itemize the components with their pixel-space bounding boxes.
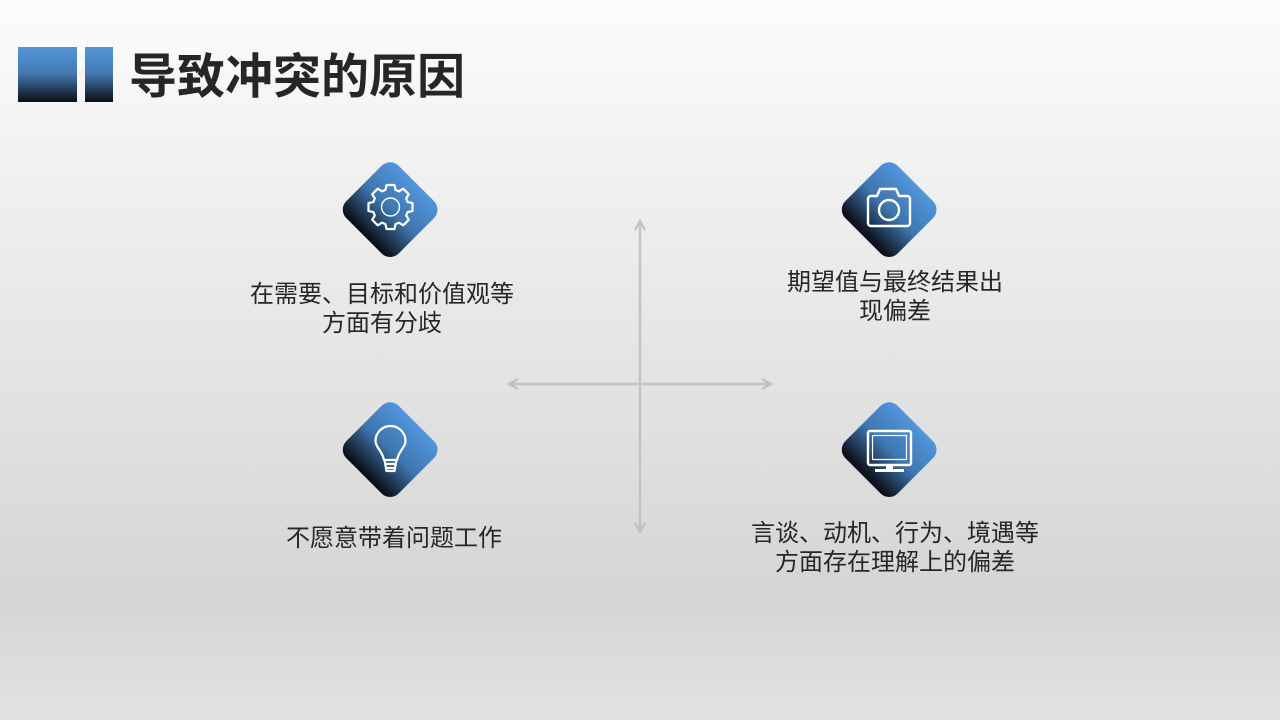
icon: monitor diamond xyxy=(842,402,936,497)
small title bar xyxy=(85,47,113,102)
text: bottom right: 言谈、动机、行为、境遇等 xyxy=(751,520,1039,547)
text: bottom right: 方面存在理解上的偏差 xyxy=(775,549,1015,576)
text: bottom right xyxy=(751,520,1039,576)
text: top left xyxy=(250,281,514,337)
cross arrows xyxy=(507,218,774,534)
text: top left: 在需要、目标和价值观等 xyxy=(250,281,514,308)
text: top right: 期望值与最终结果出 xyxy=(787,269,1003,296)
large title bar xyxy=(18,47,77,102)
icon: gear diamond xyxy=(342,162,438,257)
icon: light bulb diamond xyxy=(342,402,438,497)
title: 导致冲突的原因 xyxy=(129,51,465,104)
text: top right xyxy=(787,269,1003,325)
text: top right: 现偏差 xyxy=(859,298,931,325)
icon: camera diamond xyxy=(842,162,936,257)
text: bottom left: 不愿意带着问题工作 xyxy=(286,525,502,552)
title block icon xyxy=(18,47,113,102)
text: top left: 方面有分歧 xyxy=(322,310,442,337)
